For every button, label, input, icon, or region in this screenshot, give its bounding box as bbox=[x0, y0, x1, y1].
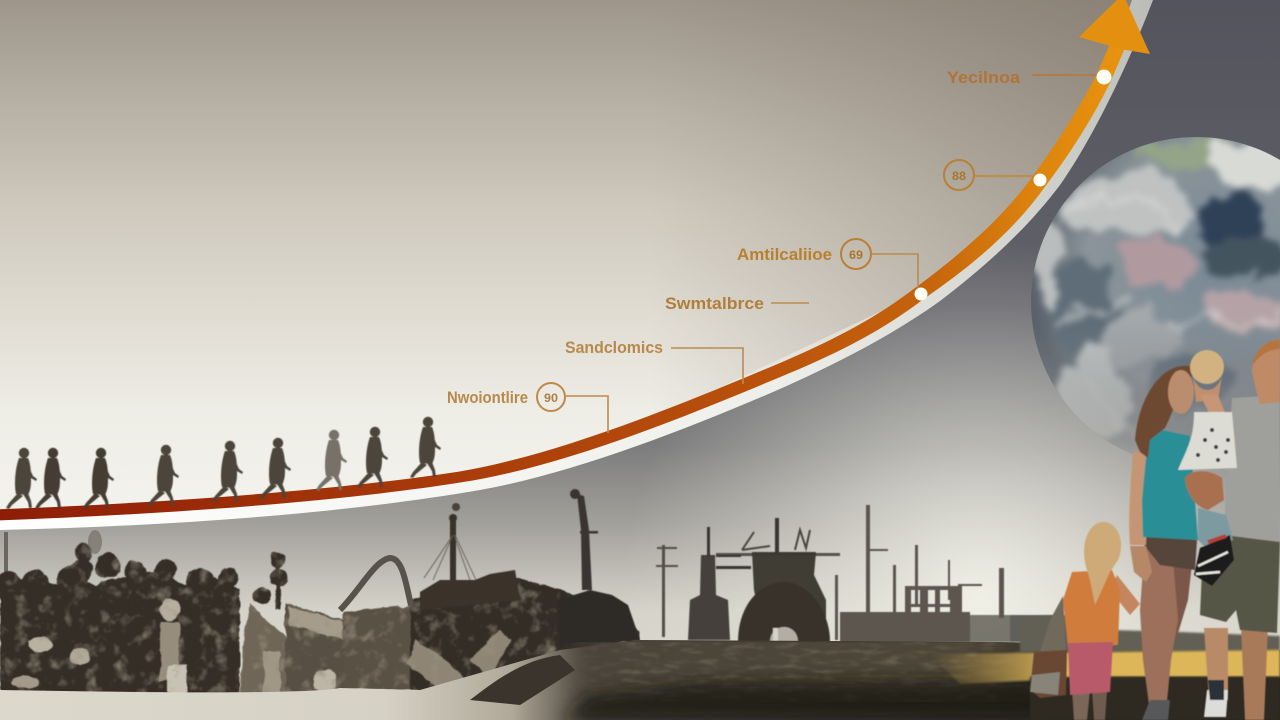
crane tower bbox=[558, 489, 640, 645]
industrial skyline bbox=[558, 489, 1070, 645]
ground bbox=[0, 616, 1280, 720]
lattice tower bbox=[688, 527, 751, 640]
dome refinery bbox=[716, 518, 840, 642]
woman bbox=[1129, 366, 1198, 720]
horizon glow bbox=[560, 230, 1280, 720]
girl bbox=[1063, 522, 1140, 720]
milestone: Amtilcaliioe bbox=[737, 239, 928, 300]
rocky middle mass bbox=[343, 578, 640, 695]
milestone: Amtilcaliioe: 69 bbox=[849, 248, 863, 262]
family group bbox=[1030, 340, 1280, 720]
milestone: Nwoiontlire: Nwoiontlire bbox=[447, 388, 528, 407]
distant hills bbox=[1020, 616, 1280, 652]
yellow field bbox=[930, 650, 1280, 684]
guyed tower bbox=[420, 503, 520, 610]
milestone: Yecilnoa: Yecilnoa bbox=[947, 68, 1021, 87]
milestone: Nwoiontlire bbox=[447, 383, 608, 433]
thatched huts bbox=[11, 599, 345, 697]
earth globe bbox=[1031, 137, 1280, 467]
milestone: icon marker: 88 bbox=[952, 169, 966, 183]
milestone: Yecilnoa bbox=[947, 68, 1112, 87]
upper panel with curve edge bbox=[0, 0, 1153, 530]
growth curve band bbox=[0, 42, 1125, 520]
curve arrowhead bbox=[1079, 0, 1150, 54]
milestone: Swmtalbrce: Swmtalbrce bbox=[665, 294, 764, 313]
man bbox=[1200, 340, 1280, 720]
toddler bbox=[1178, 350, 1237, 586]
pylon bbox=[656, 545, 678, 637]
walking figures bbox=[6, 417, 441, 509]
milestone: icon marker bbox=[944, 160, 1046, 190]
milestone: Amtilcaliioe: Amtilcaliioe bbox=[737, 245, 832, 264]
smoke and pole bbox=[4, 530, 102, 582]
milestone: Sandclomics bbox=[565, 338, 743, 384]
bag bbox=[1030, 596, 1067, 698]
arched slide structure bbox=[340, 558, 411, 610]
milestone: Nwoiontlire: 90 bbox=[544, 391, 558, 405]
distant masts and plant bbox=[835, 505, 1070, 642]
milestone: Sandclomics: Sandclomics bbox=[565, 338, 663, 357]
tree canopy silhouettes bbox=[0, 543, 288, 695]
left village scene bbox=[0, 503, 640, 697]
